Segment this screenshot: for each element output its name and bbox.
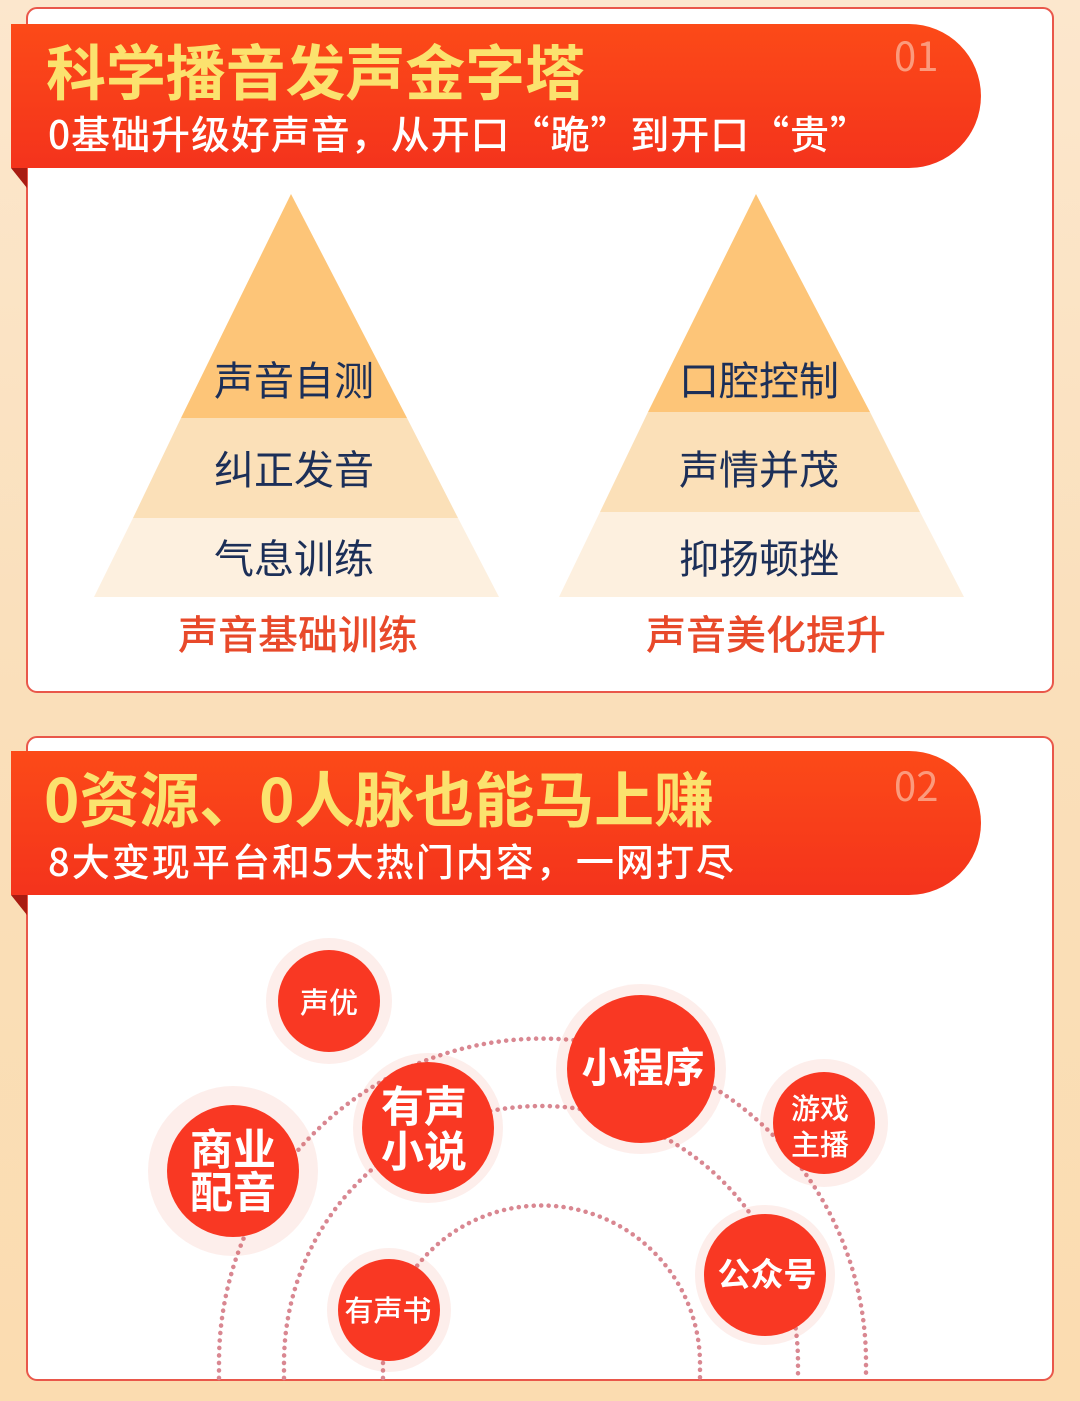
label: intonation: 抑扬顿挫 bbox=[679, 527, 839, 585]
bubble: audio novel bbox=[353, 1053, 503, 1203]
banner fold 2 bbox=[11, 895, 27, 915]
banner 2 bbox=[11, 751, 981, 895]
bubble: audio novel: 有声 bbox=[381, 1073, 467, 1135]
bubble: commercial dubbing bbox=[148, 1086, 318, 1256]
bubble: mini program: 小程序 bbox=[582, 1034, 704, 1094]
pyramid: voice basics bbox=[94, 194, 499, 661]
panel: monetization bbox=[11, 737, 1053, 1380]
tier: bottom bbox=[559, 512, 964, 597]
bubble: commercial dubbing: 配音 bbox=[190, 1159, 276, 1221]
label: correct pronunciation: 纠正发音 bbox=[214, 438, 374, 496]
tier: top bbox=[648, 194, 870, 412]
caption: voice enhancement: 声音美化提升 bbox=[646, 603, 886, 661]
label: self test: 声音自测 bbox=[214, 349, 374, 407]
dotted orbit arcs bbox=[219, 1039, 866, 1378]
bubble: audio novel: 小说 bbox=[381, 1118, 467, 1180]
bubble: audiobook: 有声书 bbox=[344, 1288, 432, 1330]
bubble: voice actor: 声优 bbox=[300, 980, 358, 1022]
pyramid: voice enhancement bbox=[559, 194, 964, 661]
bubble: official account bbox=[695, 1205, 835, 1345]
bubble: game streamer bbox=[760, 1059, 888, 1187]
bubble: audiobook bbox=[327, 1248, 451, 1372]
subheading 2: 8大变现平台和5大热门内容，一网打尽 bbox=[48, 832, 734, 887]
bubble: commercial dubbing: 商业 bbox=[190, 1116, 276, 1178]
subheading 1: 0基础升级好声音，从开口“跪”到开口“贵” bbox=[48, 105, 869, 161]
tier: middle bbox=[133, 418, 458, 518]
tier: top bbox=[181, 194, 407, 418]
label: emotion: 声情并茂 bbox=[679, 438, 839, 496]
bubble: official account: 公众号 bbox=[718, 1248, 816, 1296]
banner 1 bbox=[11, 24, 981, 168]
label: oral control: 口腔控制 bbox=[679, 349, 839, 407]
label: breath training: 气息训练 bbox=[214, 527, 374, 585]
tier: middle bbox=[600, 412, 920, 512]
bubble: mini program bbox=[556, 984, 726, 1154]
bubble: voice actor bbox=[266, 938, 392, 1064]
heading 2: 0资源、0人脉也能马上赚 bbox=[44, 753, 714, 840]
banner fold 1 bbox=[11, 168, 27, 188]
heading 1: 科学播音发声金字塔 bbox=[46, 26, 585, 113]
card 1 bbox=[27, 8, 1053, 692]
panel: pronunciation pyramid bbox=[11, 8, 1053, 692]
caption: voice basics: 声音基础训练 bbox=[178, 603, 418, 661]
number 02: 02 bbox=[894, 755, 938, 813]
bubble: game streamer: 游戏 bbox=[791, 1086, 849, 1128]
bubble: game streamer: 主播 bbox=[791, 1122, 849, 1164]
card 2 bbox=[27, 737, 1053, 1380]
tier: bottom bbox=[94, 518, 499, 597]
number 01: 01 bbox=[894, 25, 938, 83]
